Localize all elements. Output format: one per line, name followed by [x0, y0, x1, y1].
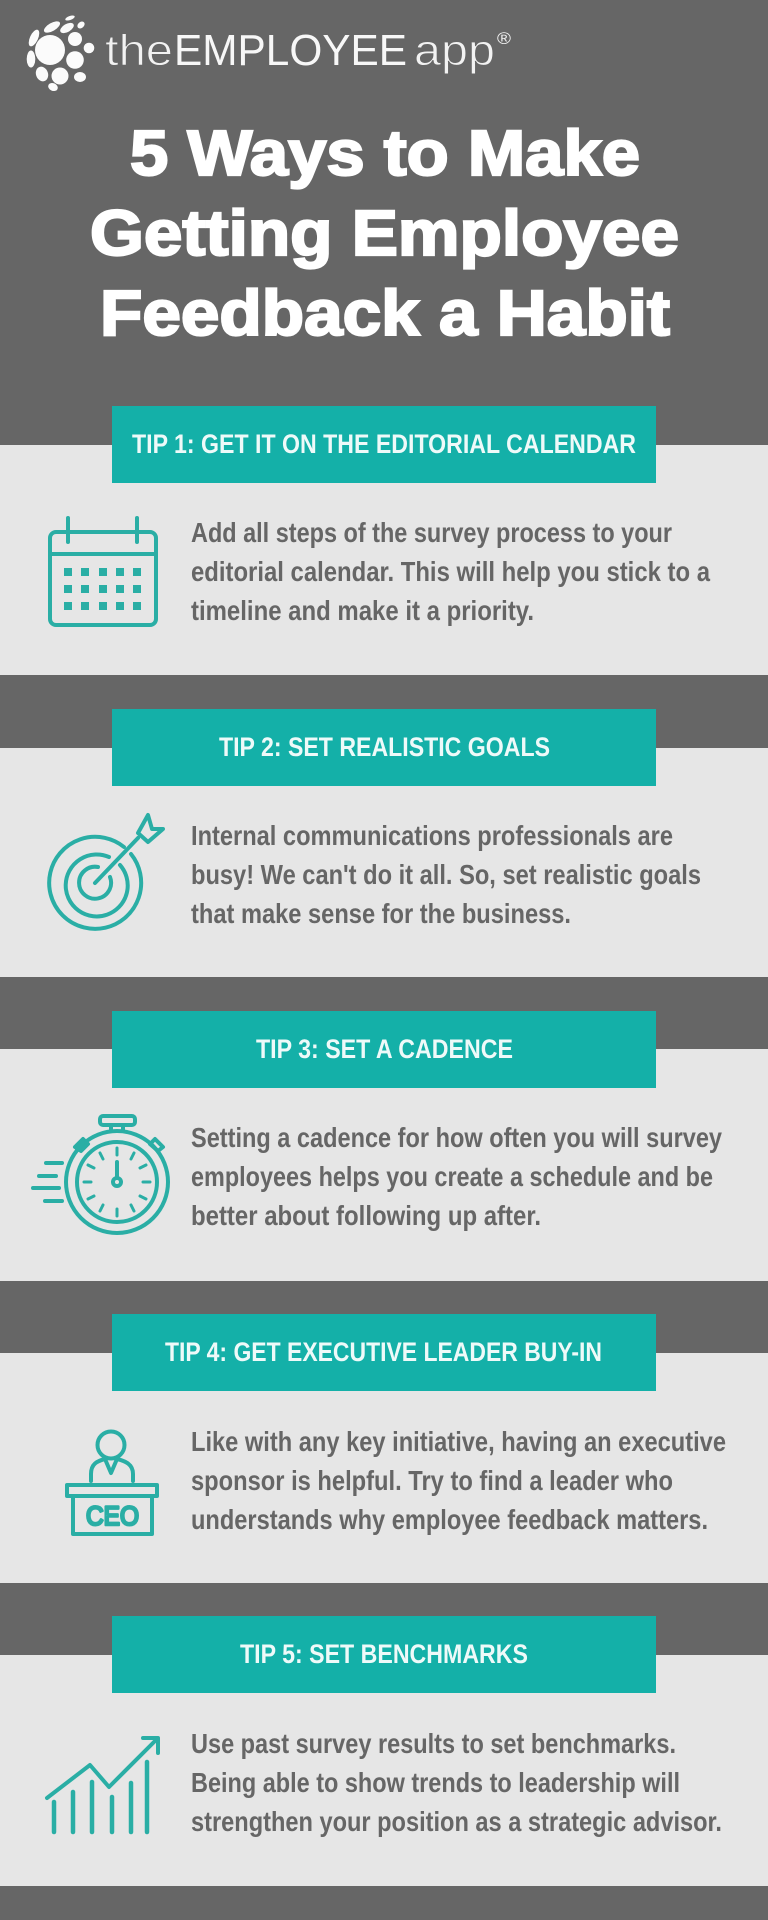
- tip 5 body text: Being able to show trends to leadership will: [191, 1767, 680, 1798]
- panel background: [0, 1049, 768, 1281]
- tip 1 body text: Add all steps of the survey process to your: [191, 517, 672, 548]
- icon: CEO at desk: [67, 1432, 157, 1534]
- panel: tip 5: [0, 1616, 768, 1886]
- logo wordmark: EMPLOYEE: [174, 26, 407, 75]
- tip 5 heading: TIP 5: SET BENCHMARKS: [240, 1639, 528, 1669]
- tip 2 heading: TIP 2: SET REALISTIC GOALS: [219, 732, 550, 762]
- tip 2 body text: that make sense for the business.: [191, 898, 571, 929]
- panel background: [0, 1655, 768, 1886]
- panel background: [0, 748, 768, 977]
- icon: stopwatch: [33, 1116, 168, 1233]
- title: 5 Ways to Make: [130, 117, 640, 189]
- tip 4 body text: [191, 1426, 726, 1535]
- panel background: [0, 445, 768, 675]
- icon: calendar: [50, 518, 156, 625]
- logo wordmark: ®: [497, 29, 512, 48]
- logo wordmark: the: [105, 26, 173, 75]
- logo: theEMPLOYEEapp: [27, 14, 512, 93]
- tip 4 heading: [112, 1314, 656, 1391]
- icon: logo dot cluster: [27, 14, 94, 93]
- panel background: [0, 1353, 768, 1583]
- tip 4 heading: TIP 4: GET EXECUTIVE LEADER BUY-IN: [165, 1337, 602, 1367]
- title: [90, 117, 679, 349]
- tip 1 body text: [191, 517, 711, 626]
- tip 4 body text: sponsor is helpful. Try to find a leader who: [191, 1465, 673, 1496]
- panel: tip 3: [0, 1011, 768, 1281]
- tip 5 body text: [191, 1728, 722, 1837]
- tip 3 heading: [112, 1011, 656, 1088]
- panel: tip 1: [0, 406, 768, 675]
- tip 1 heading: TIP 1: GET IT ON THE EDITORIAL CALENDAR: [132, 429, 636, 459]
- panel: tip 4: [0, 1314, 768, 1583]
- tip 3 body text: [191, 1122, 723, 1231]
- icon: CEO at desk: CEO: [86, 1501, 139, 1531]
- title: Getting Employee: [90, 197, 679, 269]
- tip 2 heading: [112, 709, 656, 786]
- tip 2 body text: Internal communications professionals are: [191, 820, 673, 851]
- tip 3 body text: better about following up after.: [191, 1200, 541, 1231]
- icon: target with arrow: [49, 815, 163, 929]
- logo wordmark: app: [414, 26, 495, 75]
- tip 1 heading: [112, 406, 656, 483]
- tip 5 body text: Use past survey results to set benchmarks.: [191, 1728, 676, 1759]
- panel: tip 2: [0, 709, 768, 977]
- tip 2 body text: [191, 820, 701, 929]
- tip 1 body text: timeline and make it a priority.: [191, 595, 534, 626]
- title: Feedback a Habit: [100, 277, 670, 349]
- tip 5 heading: [112, 1616, 656, 1693]
- tip 2 body text: busy! We can't do it all. So, set realistic goals: [191, 859, 701, 890]
- icon: rising bar chart with arrow: [47, 1738, 158, 1832]
- tip 3 heading: TIP 3: SET A CADENCE: [256, 1034, 513, 1064]
- logo wordmark: [105, 26, 512, 75]
